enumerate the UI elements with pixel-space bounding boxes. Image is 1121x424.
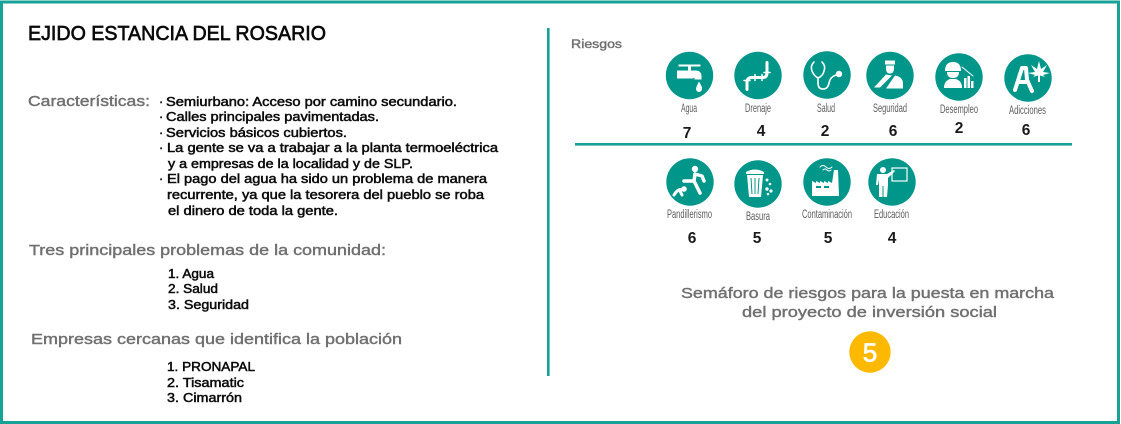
risk: pandillerismo <box>666 158 714 247</box>
risk: seguridad: 6 <box>889 123 898 140</box>
text block: characteristics list: y a empresas de la localidad y de SLP. <box>168 157 413 171</box>
heading: empresas cercanas: Empresas cercanas que identifica la población <box>31 331 402 348</box>
risk: educación: Educación <box>874 209 909 221</box>
panel: risk traffic light <box>681 285 1055 373</box>
text block: problems list <box>168 267 249 312</box>
risk: agua: 7 <box>683 125 691 142</box>
text block: characteristics list: · <box>159 172 163 186</box>
text block: characteristics list: El pago del agua ha sido un problema de manera <box>167 172 487 186</box>
text block: companies list <box>167 360 255 405</box>
text block: characteristics list: · <box>159 126 163 140</box>
text block: problems list: 1. Agua <box>168 267 214 281</box>
text block: characteristics list: Servicios básicos cubiertos. <box>166 126 347 140</box>
text block: characteristics list: Semiurbano: Acceso por camino secundario. <box>166 95 457 109</box>
text block: characteristics list: · <box>159 95 163 109</box>
risk: contaminación: 5 <box>824 230 833 247</box>
risk: desempleo: Desempleo <box>940 104 978 116</box>
risk: drenaje: Drenaje <box>745 103 771 115</box>
risk: adicciones: 6 <box>1022 122 1031 139</box>
text block: characteristics list: el dinero de toda la gente. <box>168 204 338 218</box>
title: EJIDO ESTANCIA DEL ROSARIO <box>28 23 326 45</box>
heading: riesgos: Riesgos <box>571 39 622 51</box>
risk: seguridad: Seguridad <box>873 103 907 115</box>
text block: characteristics list: · <box>159 141 163 155</box>
risk: desempleo <box>935 53 983 137</box>
text block: problems list: 3. Seguridad <box>168 298 249 312</box>
text block: characteristics list: Calles principales pavimentadas. <box>166 110 379 124</box>
risk: salud: Salud <box>817 103 835 115</box>
panel: community profile <box>28 23 498 405</box>
text block: companies list: 3. Cimarrón <box>167 391 242 405</box>
text block: characteristics list: recurrente, ya que la tesorera del pueblo se roba <box>167 188 484 202</box>
risk: desempleo: 2 <box>955 120 963 137</box>
risk: pandillerismo: 6 <box>688 230 697 247</box>
risk: educación <box>868 158 916 247</box>
heading: tres principales problemas: Tres principales problemas de la comunidad: <box>29 242 386 259</box>
risk: adicciones <box>1004 54 1052 139</box>
panel: risks <box>571 39 1072 247</box>
risk: drenaje <box>734 52 782 140</box>
risk: salud: 2 <box>821 123 829 140</box>
text block: companies list: 2. Tisamatic <box>167 376 244 390</box>
text block: characteristics list <box>159 95 498 218</box>
risk: salud <box>803 51 851 140</box>
text block: semáforo caption: del proyecto de inversión social <box>742 304 997 321</box>
risk: agua <box>666 52 713 142</box>
text block: characteristics list: · <box>159 110 163 124</box>
risk: adicciones: Adicciones <box>1009 105 1046 117</box>
risk: basura: Basura <box>746 211 770 223</box>
risk: contaminación: Contaminación <box>802 209 852 221</box>
risk: drenaje: 4 <box>757 123 766 140</box>
traffic light score <box>849 331 891 373</box>
heading: características: Características: <box>28 93 150 110</box>
text block: semáforo caption <box>681 285 1055 321</box>
risk: contaminación <box>802 158 852 247</box>
risk: basura <box>734 160 782 247</box>
text block: semáforo caption: Semáforo de riesgos para la puesta en marcha <box>681 285 1055 302</box>
traffic light score: 5 <box>863 338 877 368</box>
text block: problems list: 2. Salud <box>168 282 218 296</box>
risk: educación: 4 <box>888 230 897 247</box>
risk: pandillerismo: Pandillerismo <box>667 209 712 221</box>
risk: basura: 5 <box>753 230 762 247</box>
text block: companies list: 1. PRONAPAL <box>167 360 255 374</box>
risk: seguridad <box>866 52 914 140</box>
risk: agua: Agua <box>681 103 697 115</box>
text block: characteristics list: La gente se va a trabajar a la planta termoeléctrica <box>167 141 498 155</box>
